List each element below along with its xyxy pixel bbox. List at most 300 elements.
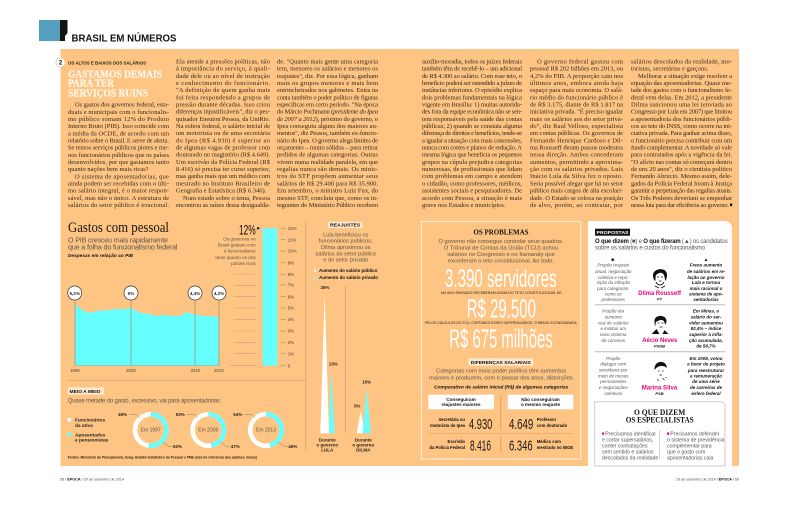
article text column 1 [68, 102, 169, 209]
article text column 4: auxílio-moradia, todos os juízes federais [422, 58, 522, 66]
article text column 3: de 2007 a 2012), próximo do governo, o [277, 116, 378, 123]
article text column 2: mas ganha mais que um médico com [176, 173, 270, 180]
intro text: funcionários públicos. [319, 239, 373, 245]
Marina: o que diz [598, 356, 629, 396]
article text column 1: desenvolvidos, por que gastamos tanto [68, 159, 169, 166]
article text column 5: últimos anos, embora ainda haja [530, 80, 623, 87]
article text column 2: de algumas vagas de professor com [176, 145, 270, 152]
chart heading [68, 220, 178, 258]
article text column 6: de uns 20 anos", diz o cientista político [631, 166, 732, 173]
triangle chart: Dilma: o governo [352, 443, 374, 448]
chart heading: O PIB cresceu mais rapidamente [68, 236, 168, 245]
bar: 12% rich countries: 5% [288, 306, 294, 311]
intro: O que dizem (■) e O que fizeram (▲) os candidatos [595, 239, 728, 245]
article text column 5: Inácio Lula da Silva fez o oposto. [530, 173, 623, 180]
Marina: o que diz: servidores por [599, 368, 628, 372]
bar: 12% rich countries: 0 [288, 363, 291, 368]
Marina: o que fez: Em 2008, votou [689, 356, 723, 361]
specialist text: right: complementar para [667, 443, 712, 449]
Aécio: o que diz: aumento [605, 314, 623, 320]
specialist text: right: que o gasto com [667, 449, 705, 455]
article text column 5: ma Rousseff deram passos modestos [530, 145, 623, 152]
article text column 3: pedidos de algumas categorias. Outras [277, 152, 378, 159]
article text column 6: equação das aposentadorias. Quase me- [631, 80, 732, 87]
specialist text: left: sem sentido e salários [602, 449, 654, 455]
article headline: SERVIÇOS RUINS [68, 89, 148, 100]
article text column 5: público mais cargos de alta escolari- [530, 188, 623, 195]
specialist text: right [667, 431, 724, 461]
bar: 12% rich countries: países ricos [231, 261, 256, 266]
article text column 3: orçamento – muito sólidos – para retirar [277, 145, 379, 152]
Aécio: o que fez: de 56,7% [696, 344, 716, 348]
box: o que dizem os especialistas [595, 402, 725, 466]
name: Dilma Rousseff: PT [657, 296, 663, 302]
article text column 3: regalias nunca são demais. Os minis- [277, 166, 378, 173]
article text column 1: salários do setor público é irracional. [68, 202, 169, 209]
chart heading: Gastos com pessoal [68, 220, 169, 236]
source note: Fontes: Ministério do Planejamento, Enap, Boletim Estatístico de Pessoal e PME (mês de referência dos salários: março) [68, 456, 258, 460]
big number: servidores: 3.390 servidores [445, 265, 557, 293]
triangle chart: Lula [316, 285, 338, 453]
Aécio: o que fez: salário do ser- [691, 314, 722, 320]
article text column 2: quisador Eneuton Pessoa, da UniRio. [176, 116, 270, 123]
Aécio: o que diz: Propõe dar [602, 308, 625, 314]
article text column 6: cos ao teto do INSS, como ocorre na ini- [631, 123, 732, 130]
salary comparison values: Médico com [537, 439, 561, 444]
article text column 6: toristas, secretárias e garçons. [631, 66, 709, 73]
name: Aécio Neves: Aécio Neves [642, 337, 678, 344]
article text column 4: públicas; 2) quando se constata alguma [422, 123, 522, 130]
footer right: 29 de setembro de 2014 I ÉPOCA I 59 [676, 476, 739, 481]
diferenças text [429, 369, 573, 391]
article text column 3 [277, 58, 379, 209]
Dilma: o que fez: Freou aumento [690, 262, 722, 268]
article text column 3: mesmo STF, concluiu que, como os in- [277, 195, 378, 202]
legend: Aumento do salário privado [319, 275, 378, 280]
box heading [626, 408, 694, 425]
bar: 12% rich countries: 4% [288, 317, 294, 322]
article text column 2: Ela atende a pressões políticas, não [176, 58, 270, 66]
article text column 5: aumentos, permitindo a aproxima- [530, 159, 623, 166]
article text column 2 [176, 58, 271, 209]
bar: 12% rich countries: 1% [288, 351, 294, 356]
chart heading: Despesas em relação ao PIB [68, 253, 134, 258]
article text column 6: ciativa privada. Para ganhar acima disso, [631, 130, 732, 137]
Marina: o que fez: a favor de projeto [687, 362, 725, 366]
Marina: o que diz: Propõe [606, 356, 621, 361]
Dilma: o que fez: Lula e tornou [692, 280, 720, 285]
article text column 3: mentos", diz Pessoa, também ex-funcio- [277, 130, 378, 137]
article text column 3: entrincheirados nos gabinetes. Entra na [277, 87, 378, 94]
article text column 3: vivem numa realidade paralela, em que [277, 159, 378, 166]
tag: PROPOSTAS [596, 230, 628, 235]
article text column 3: conta também o poder político de figuras [277, 94, 378, 101]
column headers: Conseguiram [446, 397, 476, 402]
bar: 12% rich countries: 7% [288, 283, 294, 288]
Dilma: o que diz: sição da inflação [597, 280, 631, 285]
article text column 6: para contratados após a vigência da lei. [631, 152, 732, 159]
Dilma: o que diz [595, 262, 632, 302]
Marina: o que fez: para reestruturar [687, 368, 724, 373]
specialist text: right: o sistema de previdência [667, 437, 724, 443]
sub-heading tag: MEIO A MEIO [70, 389, 101, 395]
article text column 3: salários de R$ 29.400 para R$ 35.900. [277, 180, 378, 187]
tag [328, 222, 362, 228]
Marina: o que diz: coletivas [605, 391, 623, 396]
portrait: Aécio [652, 316, 668, 334]
article text column 4: com problemas em campo e atendem [422, 173, 522, 180]
bar: 12% rich countries: 10% [288, 249, 297, 254]
area chart: despesas em relação ao PIB: 2002 [126, 368, 136, 373]
article text column 3: tros do STF propõem aumentar seus [277, 173, 378, 180]
article text column 2: doutorado no magistério (R$ 4.649). [176, 152, 270, 159]
name: Dilma Rousseff: Dilma Rousseff [638, 290, 682, 297]
triangle chart: Lula: 13% [329, 362, 338, 366]
article text column 5: 4,2% do PIB. A proporção caiu nos [530, 73, 623, 80]
article text column 2: encontrou as raízes dessa desigualda- [176, 202, 270, 209]
article text column 5: em contas públicas. Os governos de [530, 130, 623, 137]
panel: reajustes [314, 222, 378, 453]
article text column 5: de R$ 3.175, diante de R$ 1.817 na [530, 102, 623, 108]
article text column 6: a aposentadoria dos funcionários públi- [631, 116, 732, 123]
big number: teto: PELOS CÁLCULOS DO TCU, CORTANDO ESSES SUPERSALÁRIOS, O BRASIL ECONOMIZARIA [425, 321, 577, 325]
orange page background [60, 49, 739, 466]
article text column 6: nessa luta para dar eficiência ao governo. [631, 202, 729, 209]
article text column 4: o cidadão, como professores, médicos, [422, 180, 522, 187]
bar: 12% rich countries: o funcionalismo [224, 249, 256, 254]
Dilma: o que diz: anual, negociação [595, 269, 632, 274]
panel: os problemas [422, 222, 581, 459]
area chart: despesas em relação ao PIB: 5,2% [69, 291, 80, 296]
salary comparison values: mestrado no IBGE [537, 445, 573, 450]
Marina: o que fez: de uma série [692, 379, 720, 384]
salary comparison values: Secretária ou [438, 417, 465, 422]
article text column 2: 8.416) só precisa ter curso superior, [176, 166, 270, 173]
article text column 6: o funcionário precisa contribuir com um [631, 137, 732, 144]
Aécio: o que diz: novo sistema [600, 332, 627, 337]
triangle chart: Dilma: 5% [354, 404, 361, 408]
name: Aécio Neves [642, 337, 678, 348]
article text column 4: acordo com Pessoa, a situação é mais [422, 195, 522, 202]
bar: 12% rich countries: 12% [239, 222, 256, 238]
Dilma: o que fez: lação ao governo [687, 275, 725, 280]
article text column 1: quanto nações bem mais ricas? [68, 166, 149, 173]
footer left: 58 I ÉPOCA I 29 de setembro de 2014 [60, 476, 124, 481]
article text column 5: Fernando Henrique Cardoso e Dil- [530, 137, 623, 144]
bar: 12% rich countries: 8% [288, 272, 294, 277]
article text column 5: rio médio do funcionário público é [530, 94, 623, 101]
specialist text: right: Precisamos defender [670, 431, 720, 437]
triangle chart: Dilma [352, 380, 374, 453]
legend: da ativa [75, 423, 93, 429]
specialist text: left: conter contratações [602, 443, 648, 449]
Aécio: o que fez: ção acumulada, [689, 338, 723, 343]
legend: Funcionários [75, 418, 105, 424]
Aécio: o que fez: Em Minas, o [693, 308, 719, 314]
intro text: Lula beneficiou os [323, 232, 368, 238]
triangle chart: Lula: 26% [321, 285, 329, 290]
Aécio: o que diz [598, 308, 629, 343]
article text column 3: tem, menores os salários e menores os [277, 66, 378, 73]
article text column 6: "O alívio nas contas só começará dentro [631, 159, 732, 166]
intro text: excederam o teto constitucional. Ao todo, [448, 259, 554, 265]
article text column 4: assistentes sociais e pesquisadores. De [422, 188, 522, 195]
article text column 4: vigente em Brasília: 1) muitas autorida- [422, 102, 522, 108]
article text column 5: Seria possível alegar que há no setor [530, 180, 624, 187]
diferenças text: maiores e produzem, com o passar dos anos, distorções [429, 375, 573, 381]
article text column 4: benefício poderá ser estendido a juízes de [422, 80, 522, 87]
column headers: o mesmo reajuste [521, 402, 560, 407]
diferenças text: Categorias com mais poder político têm aumentos [436, 369, 566, 375]
specialist text: left: descolados da realidade [602, 455, 658, 461]
salary comparison values: Escrivão [448, 439, 465, 444]
intro text: salários do setor público [316, 251, 376, 257]
legend [67, 418, 109, 444]
box heading: O QUE DIZEM [634, 408, 686, 417]
Aécio: o que fez [689, 308, 723, 348]
article text column 4: numerosas, de profissionais que lidam [422, 166, 522, 173]
article text column 3: Em setembro, o ministro Luiz Fux, do [277, 188, 378, 195]
bar: 12% rich countries: 6% [288, 294, 294, 299]
name: Dilma Rousseff [638, 290, 682, 302]
tag: REAJUSTES [330, 223, 360, 228]
bar: 12% rich countries: 9% [288, 260, 294, 265]
triangle chart: Dilma: Durante [355, 438, 372, 443]
article text column 5: ção com os salários privados. Luís [530, 166, 623, 173]
article text column 2: "A definição de quem ganha mais [176, 87, 270, 94]
big number: servidores: NO ANO PASSADO RECEBERAM ACIMA DO TETO CONSTITUCIONAL DE [441, 291, 562, 295]
article text column 4: de R$ 4.300 ao salário. Com esse teto, o [422, 73, 522, 80]
article text column 1: ainda podem ser recebidas com o últi- [68, 180, 169, 188]
name: Marina Silva: Marina Silva [642, 384, 678, 391]
article text column 3: de. "Quanto mais gente uma categoria [277, 58, 378, 66]
article text column 6: Melhorar a situação exige resolver a [638, 73, 732, 80]
salary comparison values: 8.416 [470, 438, 491, 455]
article kicker with number badge: 2 [59, 61, 63, 67]
article text column 3: do Márcio Pochmann (presidente do Ipea [277, 109, 378, 116]
Aécio: o que fez: vidor aumentou [689, 320, 723, 326]
intro [595, 239, 728, 252]
chart heading: que a folha do funcionalismo federal [68, 242, 178, 251]
article text column 4: diferença de direitos e benefícios, tende-se [422, 130, 522, 137]
tag [595, 229, 630, 236]
article text column 2: Geografia e Estatística (R$ 6.346). [176, 188, 267, 195]
article text column 6: tade dos gastos com o funcionalismo fe- [631, 87, 732, 94]
article text column 3: Ipea conseguiu alguns dos maiores au- [277, 123, 378, 130]
article text column 6: Os Três Poderes deveriam se empenhar [631, 195, 733, 202]
article text column 3: nário do Ipea. O governo alega limites de [277, 137, 378, 144]
article text column 5: dade. O Estado se coloca na posição [530, 195, 623, 202]
area chart: despesas em relação ao PIB: 2010 [191, 368, 201, 373]
bar: 12% rich countries: 3% [288, 329, 294, 334]
Aécio: o que diz: real de salários [598, 320, 629, 326]
big number: teto [425, 294, 577, 325]
article text column 6: fundo complementar. A novidade só vale [631, 145, 732, 152]
salary comparison values: 6.346 [509, 438, 533, 455]
Dilma: o que diz: coletiva e repo- [598, 275, 629, 280]
specialist text: right: aposentadorias caia [667, 455, 714, 461]
Marina: o que fez: esfera federal [691, 391, 721, 396]
big number: servidores [441, 265, 562, 295]
article text column 3: tegrantes do Ministério Público recebem [277, 202, 378, 209]
Dilma: o que diz: professores [601, 297, 626, 302]
article text column 1: mo salário integral, é o maior respon- [68, 188, 169, 195]
article text column 4: também têm de recebê-lo – um adicional [422, 66, 522, 73]
bar: 12% rich countries: Os governos no [223, 237, 256, 242]
area chart: despesas em relação ao PIB: 1995 [70, 368, 80, 373]
specialist text: left: Precisamos identificar [605, 431, 656, 437]
article text column 2: Um escrivão da Polícia Federal (R$ [176, 159, 271, 166]
article text column 6: Congresso por Lula em 2007) que limitou [631, 109, 733, 116]
donut 1997: 48% [118, 412, 127, 417]
intro text: O governo não consegue controlar seus quadros. [438, 239, 564, 245]
article kicker with number badge [56, 58, 146, 67]
article text column 1: a média da OCDE, de acordo com um [68, 130, 169, 137]
name: Aécio Neves: PSDB [654, 344, 665, 348]
sub-heading text: Quase metade do gasto, excessivo, vai para aposentadorias [68, 398, 220, 404]
portrait: Dilma [653, 269, 667, 288]
portrait: Marina [654, 362, 667, 381]
article headline [68, 70, 162, 100]
bar: 12% rich countries: tanto quanto os dos [215, 255, 256, 260]
bar: 12% rich countries: 2% [288, 340, 294, 345]
Marina: o que diz: permanentes [599, 379, 627, 384]
salary comparison values: da Polícia Federal [429, 445, 465, 450]
article text column 1: relatório sobre o Brasil. E serve de alerta. [68, 137, 169, 144]
bar: 12% rich countries: 12% [288, 226, 297, 231]
Dilma: o que fez [687, 262, 726, 302]
article headline: PARA TER [68, 79, 114, 90]
salary comparison values: 4.649 [509, 416, 533, 433]
donut 2013: Em 2013 [256, 428, 276, 434]
article headline: GASTAMOS DEMAIS [68, 70, 162, 80]
Marina: o que diz: meio de mesas [598, 374, 629, 378]
donut 1997: Em 1997 [141, 428, 161, 434]
article text column 4: a igualar a situação com mais concessões, [422, 137, 522, 144]
article text column 1: duais e municipais com o funcionalis- [68, 109, 169, 116]
intro text: salários no Congresso e no Itamaraty que [447, 252, 555, 258]
salary comparison values: 4.930 [469, 416, 492, 433]
intro text: O Tribunal de Contas da União (TCU) achou [444, 245, 558, 251]
box heading: OS ESPECIALISTAS [626, 416, 694, 425]
article text column 3: específicas em certo período. "Na época [277, 102, 378, 108]
article text column 6: deral vem delas. Em 2012, a presidente [631, 94, 732, 101]
article kicker with number badge: OS ALTOS E BAIXOS DOS SALÁRIOS [68, 60, 146, 66]
Dilma: o que fez: sistema de apo- [689, 292, 724, 296]
article text column 4: grupos na cúpula prejudica categorias [422, 159, 522, 166]
legend [314, 268, 378, 280]
intro text: e do setor privado [323, 258, 368, 264]
heading: OS PROBLEMAS [474, 228, 528, 237]
article text column 4 [422, 58, 522, 209]
area chart: despesas em relação ao PIB: 5% [128, 291, 134, 296]
article text column 5: nessa direção. Ambos concederam [530, 152, 623, 159]
article text column 6: Fernando Abrucio. Mesmo assim, dele- [631, 173, 732, 180]
article text column 1: mo público somam 12% do Produto [68, 116, 169, 123]
article text column 5: do", diz Raul Velloso, especialista [530, 123, 623, 130]
triangle chart: Dilma: 10% [362, 380, 371, 384]
intro: sobre os salários e custos do funcionalismo [595, 246, 706, 252]
article text column 2: mestrado no Instituto Brasileiro de [176, 180, 270, 187]
big number: economia: R$ 675 milhões [449, 324, 553, 354]
article text column 1: Se temos serviços públicos piores e me- [68, 145, 169, 152]
donut 2013: 54% [233, 412, 242, 417]
legend: e pensionistas [75, 438, 109, 444]
area chart: despesas em relação ao PIB: 2013 [214, 368, 224, 373]
article text column 2: do Ipea (R$ 4.930) é superior ao [176, 137, 270, 144]
article text column 4: grave nos Estados e municípios. [422, 202, 506, 209]
article text column 2: Num estado sobre o tema, Pessoa [183, 195, 270, 202]
Dilma: o que fez: mais racional o [690, 286, 723, 291]
triangle chart: Lula: LULA [321, 448, 334, 453]
Marina: o que fez [687, 356, 725, 396]
name: Marina Silva [642, 384, 678, 396]
article text column 1: sável, mas não o único. A estrutura de [68, 195, 169, 202]
article text column 4: mesma lógica que beneficia os pequenos [422, 152, 522, 159]
donut 2005: Em 2005 [198, 428, 219, 434]
article text column 1: O sistema de aposentadorias, que [75, 173, 169, 180]
Dilma: o que fez: de salários em re- [687, 269, 726, 274]
legend: Aumento do salário público [319, 268, 378, 273]
donut 1997: 52% [173, 444, 182, 449]
diferenças salariais tag [468, 358, 533, 366]
area chart: despesas em relação ao PIB: 4,4% [190, 291, 200, 296]
article text column 5: iniciativa privada. "É preciso igualar [530, 108, 624, 116]
article text column 1: Os gastos dos governos federal, esta- [75, 102, 169, 109]
article text column 3: mais os grupos menores e mais bem [277, 80, 378, 87]
article text column 1: Interno Bruto (PIB). Isso coincide com [68, 123, 169, 130]
Marina: o que diz: dialogar com [600, 362, 626, 366]
article text column 5: de alvo, porém, ao contratar, por [530, 202, 624, 209]
salary comparison values: motorista do Ipea [430, 423, 466, 428]
article text column 5: pessoal R$ 202 bilhões em 2013, ou [530, 66, 624, 73]
column headers: reajustes maiores [441, 402, 481, 407]
donut 2005: 53% [176, 412, 185, 417]
diferenças salariais tag: DIFERENÇAS SALARIAIS [471, 360, 532, 366]
triangle chart: Lula: Durante [319, 438, 336, 443]
diferenças text: Comparativo de salário inicial (R$) de algumas categorias [434, 385, 569, 391]
donut 2005 [176, 412, 240, 449]
article text column 6: Dilma sancionou uma lei (enviada ao [631, 102, 732, 108]
article text column 3: reajustes", diz. Por essa lógica, ganham [277, 73, 378, 80]
article text column 2: dade dele ou ao nível de instrução [176, 73, 270, 80]
article text column 2: diferenças injustificáveis", diz o pes- [176, 109, 270, 116]
area chart: despesas em relação ao PIB: 4,2% [214, 291, 224, 296]
donut 2013 [233, 412, 297, 449]
salary comparison values: com doutorado [537, 423, 568, 428]
article text column 2: um motorista ou de uma secretária [176, 130, 270, 137]
article text column 5: espaço para mais economia. O salá- [530, 87, 623, 94]
panel: meio a meio [67, 387, 297, 449]
article text column 2: pressão durante décadas. Isso criou [176, 102, 271, 108]
article text column 2: Na esfera federal, o salário inicial de [176, 123, 270, 130]
triangle chart: Dilma: DILMA [356, 448, 371, 453]
donut 1997 [118, 412, 182, 449]
section header: BRASIL EM NÚMEROS [72, 32, 177, 44]
section header [39, 20, 177, 44]
name: Marina Silva: PSB [655, 391, 664, 396]
Aécio: o que diz: e instituir um [601, 326, 626, 331]
salary comparison values: Professor [537, 417, 557, 422]
specialist text: left: e cortar supersalários, [602, 437, 653, 443]
intro text [316, 232, 376, 264]
article text column 6: gados da Polícia Federal foram à Justiça [631, 180, 732, 187]
intro text: Dilma aproximou os [321, 245, 371, 251]
bar: 12% rich countries [215, 222, 297, 368]
bar: 12% rich countries: Brasil gastam com [218, 243, 256, 248]
Aécio: o que fez: 92,4% – índice [691, 326, 722, 331]
salary comparison values [429, 416, 573, 455]
